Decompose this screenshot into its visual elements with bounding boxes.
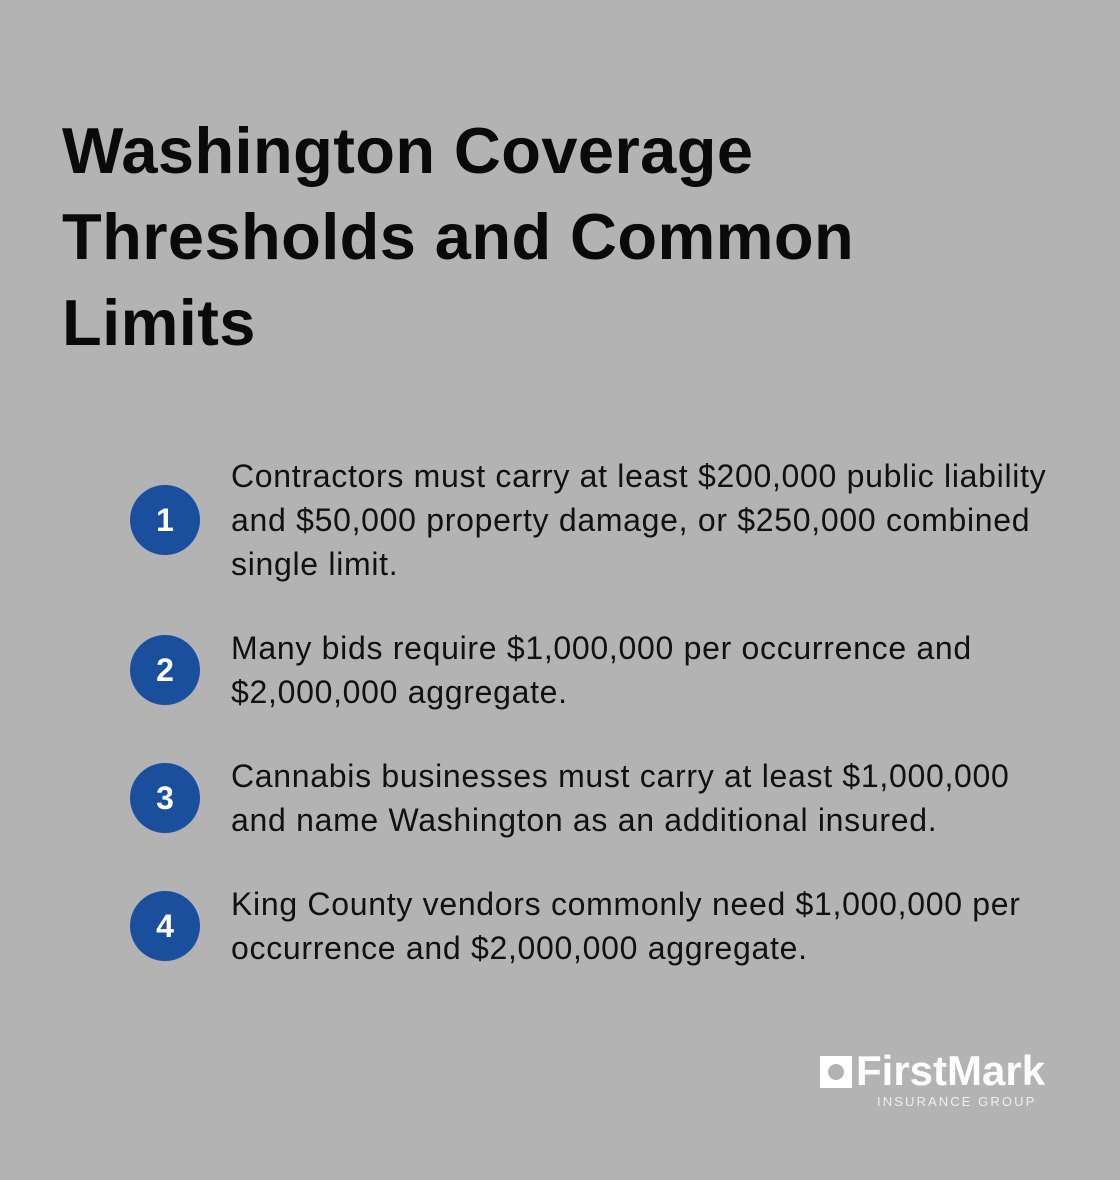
text 4: King County vendors commonly need $1,000,000 per xyxy=(231,886,1021,922)
text 1: single limit. xyxy=(231,546,398,582)
logo subtitle: INSURANCE GROUP xyxy=(877,1094,1036,1109)
title xyxy=(62,114,854,359)
text 4: occurrence and $2,000,000 aggregate. xyxy=(231,930,808,966)
text 2: $2,000,000 aggregate. xyxy=(231,674,568,710)
icon: number 4 xyxy=(130,891,200,961)
icon: number 3: 3 xyxy=(156,780,174,816)
item 1 xyxy=(130,458,1046,582)
icon: number 1 xyxy=(130,485,200,555)
text 3: and name Washington as an additional insured. xyxy=(231,802,937,838)
item 4 xyxy=(130,886,1021,966)
text 1: Contractors must carry at least $200,000 public liability xyxy=(231,458,1046,494)
text 1 xyxy=(231,458,1046,582)
logo icon xyxy=(820,1056,852,1088)
icon: number 2 xyxy=(130,635,200,705)
text 2 xyxy=(231,630,972,710)
item 2 xyxy=(130,630,972,710)
icon: number 3 xyxy=(130,763,200,833)
icon: number 2: 2 xyxy=(156,652,174,688)
title: Thresholds and Common xyxy=(62,200,854,273)
logo xyxy=(820,1047,1045,1109)
text 4 xyxy=(231,886,1021,966)
icon: number 4: 4 xyxy=(156,908,174,944)
title: Washington Coverage xyxy=(62,114,753,187)
title: Limits xyxy=(62,286,256,359)
text 3: Cannabis businesses must carry at least $1,000,000 xyxy=(231,758,1010,794)
icon: number 1: 1 xyxy=(156,502,174,538)
text 2: Many bids require $1,000,000 per occurrence and xyxy=(231,630,972,666)
logo text: FirstMark xyxy=(856,1047,1045,1094)
text 1: and $50,000 property damage, or $250,000 combined xyxy=(231,502,1030,538)
item 3 xyxy=(130,758,1010,838)
text 3 xyxy=(231,758,1010,838)
